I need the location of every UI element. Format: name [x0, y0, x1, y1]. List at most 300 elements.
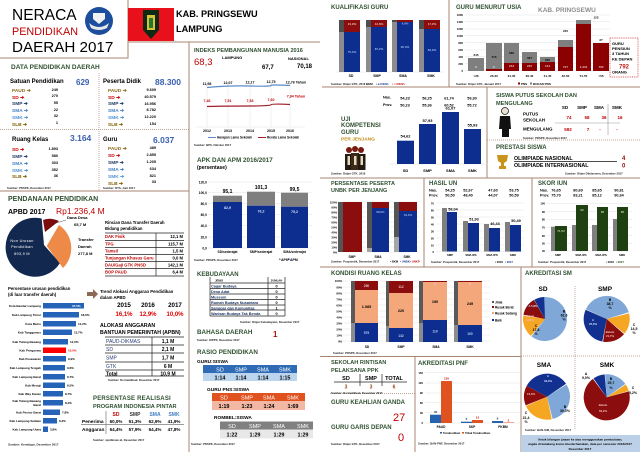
- panel: hasil UN: 50,50: [445, 194, 455, 198]
- line chart: IPM: 12,07: [224, 81, 232, 85]
- stacked bar chart: kondisi ruang kelas: 60%: [336, 304, 343, 308]
- bar chart: hasil UN: 46,43: [490, 222, 500, 226]
- table: rincian dana transfer daerah: 12,1 M: [170, 234, 184, 239]
- panel: prestasi siswa: 0: [622, 164, 626, 170]
- stacked bar chart: kualifikasi: 17,2%: [428, 22, 437, 26]
- bar chart: uji kompetensi: [390, 106, 488, 173]
- panel: guru: SMP ➔: [108, 160, 125, 166]
- panel: kebudayaan: Sanggar dan Komunitas: [211, 306, 255, 310]
- line chart: IPM: 7,60: [268, 98, 274, 102]
- panel: guru menurut usia: Sumber: Ditjen GTK, Januari 2017: [456, 82, 502, 86]
- bar chart: persentase urusan pendidikan: 3,8%: [50, 428, 57, 432]
- panel: trend alokasi anggaran pendidikan: 10,0%: [166, 312, 184, 318]
- panel: indeks pembangunan manusia: 68,3: [194, 57, 212, 68]
- bar chart: akreditasi PNF: SKP: [469, 425, 476, 429]
- pie chart: APBD: [6, 215, 94, 277]
- table: rombel siswa: 1:22: [226, 432, 238, 438]
- panel: akreditasi PNF: AKREDITASI PNF: [418, 361, 468, 367]
- panel: trend alokasi anggaran pendidikan: [100, 289, 184, 318]
- panel: kebudayaan: JUMLAH: [271, 278, 282, 282]
- pie chart: SMA: [523, 362, 571, 424]
- stacked bar chart: APK APM: 82,9: [224, 206, 231, 210]
- bar chart: hasil UN: 60: [431, 208, 434, 212]
- panel: skor IUN: 85,12: [592, 194, 602, 198]
- stacked bar chart: usia guru: 240: [527, 64, 532, 68]
- table: alokasi anggaran bantuan pemerintah: Total: [106, 372, 118, 378]
- table: rincian dana transfer daerah: DAK Fisik: [105, 234, 125, 239]
- table: persentase realisasi PIP: SD: [113, 412, 120, 418]
- panel: indeks pembangunan manusia: [194, 48, 313, 147]
- stacked bar chart: kualifikasi: 4,9%: [402, 22, 409, 26]
- panel: peserta didik: 16.956: [144, 102, 156, 106]
- title block: PENDIDIKAN: [12, 26, 78, 38]
- pie chart: APBD: Transfer: [78, 237, 94, 242]
- regency logo and name: KAB. PRINGSEWU: [176, 9, 258, 19]
- panel: uji kompetensi guru: 50,23: [400, 104, 410, 108]
- table: guru PNS siswa: 1:23: [241, 404, 253, 410]
- bar chart: skor IUN: 60: [542, 234, 545, 238]
- stacked bar chart: UNBK: 40%: [331, 230, 338, 234]
- panel: rasio pendidikan: [191, 349, 313, 446]
- bar chart: skor IUN: SMK: [619, 253, 625, 257]
- callout: guru pensiun: GURU: [612, 41, 624, 46]
- pie chart: SMP: B: [609, 298, 612, 302]
- table: guru siswa: SD: [216, 368, 224, 374]
- arrow: trend alokasi: [87, 289, 98, 299]
- bar chart: persentase urusan pendidikan: Kab Tulang Bawang: [13, 399, 41, 403]
- legend: [492, 300, 517, 322]
- stacked bar chart: usia guru: 1600: [457, 13, 463, 17]
- panel: peserta didik: SLB ➔: [108, 122, 124, 128]
- panel: siswa putus sekolah dan mengulang: MENGULANG: [523, 126, 553, 132]
- pie chart: SMP: %: [608, 306, 612, 310]
- bar chart: persentase urusan pendidikan: 7,8%: [62, 410, 69, 414]
- stacked bar chart: kualifikasi: [335, 20, 445, 86]
- bar chart: persentase urusan pendidikan: [8, 286, 90, 446]
- panel: indeks pembangunan manusia: INDEKS PEMBANGUNAN MANUSIA 2016: [194, 48, 303, 54]
- table: alokasi anggaran bantuan pemerintah: ALOKASI ANGGARAN: [100, 323, 155, 329]
- table: rombel siswa: SMA: [273, 424, 285, 430]
- panel: prestasi siswa: PRESTASI SISWA: [496, 145, 547, 151]
- bar chart: hasil UN: [431, 202, 524, 264]
- panel: uji kompetensi guru: 54,23: [400, 96, 410, 100]
- line chart: IPM: 2012: [203, 129, 211, 133]
- bar chart: persentase urusan pendidikan: Kota Metro: [25, 322, 41, 326]
- pie chart: SMA: 33,3%: [544, 379, 552, 383]
- pie chart: SMA: %: [524, 420, 528, 424]
- line chart: IPM: 12,76 Tahun: [286, 80, 306, 84]
- panel: guru: 1.205: [146, 160, 156, 164]
- pie chart: SMA: B: [564, 405, 567, 409]
- stacked bar chart: APK APM: 101,3: [255, 185, 267, 191]
- panel: trend alokasi anggaran pendidikan: 16,1%: [115, 312, 133, 318]
- panel: guru: 33: [152, 180, 156, 184]
- pie chart: SMP: 38,7: [607, 302, 613, 306]
- panel: kondisi ruang kelas: [331, 271, 517, 355]
- bar chart: persentase urusan pendidikan: Kab Way Kanan: [18, 392, 41, 396]
- panel: kebudayaan: 1: [275, 306, 278, 310]
- panel: kebudayaan: Museum: [211, 296, 227, 300]
- stacked bar chart: usia guru: 1.344: [580, 65, 588, 69]
- panel: kebudayaan: Warisan Budaya Tak Benda: [211, 312, 261, 316]
- bar chart: hasil UN: 58,04: [448, 208, 459, 212]
- callout: guru pensiun: 792: [619, 64, 630, 70]
- panel: persentase peserta UNBK: PERSENTASE PESERTA: [331, 181, 395, 187]
- bar chart: persentase urusan pendidikan: Kota Bandar Lampung: [9, 304, 41, 308]
- panel: kebudayaan: KEBUDAYAAN: [197, 272, 239, 278]
- panel: kebudayaan: 0: [275, 312, 278, 316]
- table: guru PNS siswa: SMA: [263, 396, 275, 402]
- table: persentase realisasi PIP: SMP: [130, 412, 141, 418]
- panel: guru: SD ➔: [108, 153, 121, 159]
- panel: sekolah rintisan PPK: TOTAL: [385, 376, 404, 382]
- panel: guru: SMK ➔: [108, 174, 125, 180]
- panel: trend alokasi anggaran pendidikan: 2016: [141, 302, 155, 309]
- panel: bahasa daerah: 1: [273, 330, 278, 339]
- bar chart: uji kompetensi: SMA: [446, 168, 455, 173]
- panel: hasil UN: 52,67: [463, 188, 473, 192]
- panel: peserta didik: PAUD ➔: [108, 88, 128, 94]
- title block: NERACA: [12, 7, 77, 24]
- panel: siswa putus sekolah dan mengulang: 58: [584, 115, 590, 120]
- panel: kualifikasi guru: KUALIFIKASI GURU: [331, 5, 388, 11]
- pie chart: SD: %: [534, 332, 538, 336]
- panel: hasil UN: 48,40: [463, 194, 473, 198]
- stacked bar chart: kondisi ruang kelas: 579: [364, 331, 369, 335]
- panel: kebudayaan: Cagar Budaya: [211, 284, 237, 288]
- table: persentase realisasi PIP: 64,4%: [110, 427, 122, 432]
- pie chart: SMP: A: [592, 318, 594, 322]
- panel: trend alokasi anggaran pendidikan: 2015: [117, 302, 131, 309]
- panel: sekolah rintisan PPK: 3: [370, 384, 373, 390]
- stacked bar chart: APK APM: APK: [281, 258, 289, 262]
- panel: skor IUN: 90,34: [614, 194, 625, 198]
- line chart: IPM: [196, 80, 306, 140]
- panel: siswa putus sekolah dan mengulang: 16: [617, 115, 623, 120]
- panel: sekolah rintisan PPK: [331, 360, 407, 395]
- panel: peserta didik: 12.220: [144, 115, 156, 119]
- pie chart: SMK: SMK: [600, 362, 615, 369]
- bar chart: persentase urusan pendidikan: Kab Tulang Bawang: [13, 340, 41, 344]
- table: persentase realisasi PIP: 60,0%: [110, 419, 122, 424]
- stacked bar chart: usia guru: 200: [458, 62, 463, 66]
- stacked bar chart: kualifikasi: 87,2%: [375, 47, 384, 51]
- bar chart: persentase urusan pendidikan: 9,5%: [67, 384, 74, 388]
- bar chart: skor IUN: 90: [580, 208, 584, 212]
- legend: Baik: [495, 318, 502, 322]
- panel: guru menurut usia: GURU MENURUT USIA: [456, 5, 522, 11]
- panel: uji kompetensi guru: 60,52: [444, 104, 454, 108]
- bar chart: hasil UN: 70: [431, 202, 434, 206]
- table: persentase realisasi PIP: 62,9%: [149, 419, 161, 424]
- panel: persentase peserta UNBK: Sumber: Puspendik, Desember 2017: [331, 260, 380, 264]
- table: rincian dana transfer daerah: Tamsil: [105, 248, 118, 254]
- bar chart: hasil UN: SMA IPA: [465, 253, 477, 257]
- panel: sekolah rintisan PPK: SEKOLAH RINTISAN: [331, 360, 386, 366]
- stacked bar chart: usia guru: 200: [545, 58, 550, 62]
- panel: skor IUN: [538, 181, 632, 264]
- stacked bar chart: UNBK: 20%: [331, 240, 338, 244]
- stacked bar chart: APK APM: 100,0: [199, 191, 207, 195]
- icon: ministry logo: [85, 7, 113, 35]
- bar chart: persentase urusan pendidikan: Barat: [33, 403, 41, 407]
- panel: siswa putus sekolah dan mengulang: -: [616, 127, 618, 132]
- panel: hasil UN: Sumber: Puspendik, Desember 2017: [431, 260, 480, 264]
- pie chart: SD: [526, 286, 567, 336]
- stacked bar chart: usia guru: 800: [458, 41, 463, 45]
- stacked bar chart: kondisi ruang kelas: 250: [364, 284, 369, 288]
- bar chart: persentase urusan pendidikan: 6,3%: [59, 419, 66, 423]
- panel: guru: 821: [150, 174, 156, 178]
- panel: sekolah rintisan PPK: PELAKSANA PPK: [331, 368, 379, 374]
- table: alokasi anggaran bantuan pemerintah: BANTUAN PEMERINTAH (APBN): [100, 330, 181, 336]
- bar chart: hasil UN: 50,49: [511, 219, 521, 223]
- stacked bar chart: UNBK: 80%: [331, 210, 338, 214]
- stacked bar chart: UNBK: ▪ UNKP: [410, 260, 420, 264]
- pie chart: SMK: 25,7: [608, 381, 614, 385]
- table: guru siswa: SMA: [257, 368, 269, 374]
- stacked bar chart: usia guru: 600: [458, 48, 463, 52]
- panel: siswa putus sekolah dan mengulang: SMA: [594, 105, 605, 110]
- panel: indeks pembangunan manusia: NASIONAL: [288, 56, 309, 61]
- table: persentase realisasi PIP: SMA: [149, 412, 161, 418]
- stacked bar chart: APK APM: 95,1: [223, 189, 233, 195]
- panel: peserta didik: 8.782: [146, 108, 156, 112]
- bar chart: persentase urusan pendidikan: 13,7%: [74, 330, 83, 334]
- panel: trend alokasi anggaran pendidikan: 12,9%: [139, 312, 157, 318]
- bar chart: uji kompetensi: SMP: [423, 168, 432, 173]
- panel: trend alokasi anggaran pendidikan: dalam APBD: [100, 295, 126, 300]
- stacked bar chart: usia guru: 122: [593, 16, 599, 20]
- pie chart: APBD: Daerah: [78, 244, 92, 249]
- panel: skor IUN: 80,69: [573, 188, 583, 192]
- table: alokasi anggaran bantuan pemerintah: 10,9 M: [160, 372, 176, 378]
- stacked bar chart: usia guru: BUKAN PNS: [533, 82, 551, 86]
- line chart: IPM: 7,84 Tahun: [287, 94, 305, 98]
- bar chart: hasil UN: 10: [431, 244, 434, 248]
- bar chart: akreditasi PNF: PAUD: [437, 425, 446, 429]
- stacked bar chart: UNBK: 10%: [331, 246, 338, 250]
- callout: guru pensiun: [610, 38, 638, 77]
- note box: [521, 435, 640, 452]
- stacked bar chart: usia guru: 1400: [457, 20, 463, 24]
- bar chart: persentase urusan pendidikan: 9,6%: [67, 366, 74, 370]
- panel: peserta didik: 154: [150, 122, 157, 126]
- table: persentase realisasi PIP: PERSENTASE REALISASI: [93, 396, 171, 402]
- stacked bar chart: UNBK: ▪ BKM: [390, 260, 399, 264]
- panel: bahasa daerah: BAHASA DAERAH: [197, 329, 253, 336]
- stacked bar chart: usia guru: 36-40: [526, 74, 534, 78]
- bar chart: skor IUN: ▪ 2016: [606, 260, 614, 264]
- panel: uji kompetensi guru: Prov.: [383, 103, 392, 107]
- pie chart: SMP: C: [633, 323, 636, 327]
- pie chart: SMP: %: [632, 331, 636, 335]
- panel: guru garis depan: [331, 425, 404, 446]
- panel: ruang kelas: 1.893: [48, 147, 58, 151]
- panel: satuan pendidikan: 249: [52, 88, 58, 92]
- stacked bar chart: kondisi ruang kelas: 20%: [336, 328, 343, 332]
- note box: angka di belakang koma disederhanakan, data per semester 2016/2017: [528, 442, 632, 446]
- stacked bar chart: kondisi ruang kelas: 220: [398, 309, 404, 313]
- bar chart: persentase urusan pendidikan: 9,7%: [67, 375, 74, 379]
- panel: siswa putus sekolah dan mengulang: 592: [564, 127, 572, 132]
- panel: sekolah rintisan PPK: Sumber: Dormatikbud, Desember 2017: [331, 391, 383, 395]
- bar chart: hasil UN: SMK: [510, 253, 516, 257]
- line chart: IPM: 7,51: [224, 99, 232, 103]
- panel: kebudayaan: [197, 272, 300, 324]
- line chart: IPM: 2014: [246, 129, 254, 133]
- panel: satuan pendidikan: 629: [76, 78, 90, 87]
- stacked bar chart: kondisi ruang kelas: 50%: [336, 310, 343, 314]
- panel: satuan pendidikan: Satuan Pendidikan: [10, 79, 64, 85]
- table: guru PNS siswa: SMP: [241, 396, 253, 402]
- bar chart: uji kompetensi: 54,62: [400, 134, 411, 138]
- panel: satuan pendidikan: SMP ➔: [12, 101, 29, 107]
- note box: Desember 2017: [569, 447, 592, 451]
- panel: guru garis depan: Sumber: Ditjen GTK, Desember 2017: [331, 442, 380, 446]
- bar chart: persentase urusan pendidikan: Kab Lampung Timur: [12, 313, 42, 317]
- stacked bar chart: kualifikasi: ▪ ≥ D4/S1: [376, 82, 389, 86]
- panel: ruang kelas: SLB ➔: [12, 174, 28, 180]
- panel: hasil UN: 44,07: [488, 194, 498, 198]
- bar chart: uji kompetensi: SMK: [468, 168, 477, 173]
- table: persentase realisasi PIP: Penerima: [82, 419, 104, 425]
- bar chart: persentase urusan pendidikan: 37,5%: [72, 304, 81, 308]
- table: guru PNS siswa: [207, 387, 305, 410]
- panel: rasio pendidikan: Sumber: PDSPK, Desember 2017: [191, 442, 235, 446]
- panel: skor IUN: 90,81: [614, 188, 624, 192]
- table: alokasi anggaran bantuan pemerintah: 6 M: [164, 364, 172, 370]
- stacked bar chart: usia guru: 717: [563, 65, 568, 69]
- panel: siswa putus sekolah dan mengulang: SD: [562, 105, 569, 110]
- stacked bar chart: kualifikasi: 12,8%: [375, 22, 384, 26]
- stacked bar chart: kondisi ruang kelas: 110: [432, 330, 438, 334]
- pie chart: SD: 62,6: [561, 314, 567, 318]
- bar chart: skor IUN: 71,52: [557, 229, 565, 233]
- panel: ruang kelas: SD ➔: [12, 147, 25, 153]
- panel: kebudayaan: 0: [275, 284, 278, 288]
- panel: indeks pembangunan manusia: Sumber: BPS, Oktober 2017: [194, 143, 232, 147]
- panel: siswa putus sekolah dan mengulang: SEKOLAH: [523, 118, 545, 122]
- panel: satuan pendidikan: 22: [54, 108, 58, 112]
- bar chart: uji kompetensi: SD: [403, 168, 408, 173]
- table: alokasi anggaran bantuan pemerintah: 1,1 M: [162, 339, 174, 345]
- bar chart: persentase urusan pendidikan: Kab Pesisir Barat: [16, 410, 41, 414]
- pie chart: SD: A 5,8%: [528, 304, 538, 308]
- stacked bar chart: UNBK: [330, 200, 420, 264]
- table: rombel siswa: [214, 415, 313, 438]
- table: alokasi anggaran bantuan pemerintah: 1,7 M: [162, 356, 174, 362]
- panel: guru menurut usia: [456, 5, 638, 86]
- bar chart: persentase urusan pendidikan: 8,4%: [65, 401, 72, 405]
- panel: peserta didik: 88.300: [155, 77, 181, 87]
- panel: peserta didik: SMK ➔: [108, 115, 125, 121]
- panel: hasil UN: Prov.: [429, 194, 438, 198]
- pie chart: SMA: 21,4: [523, 416, 529, 420]
- panel: uji kompetensi guru: 55,36: [422, 104, 432, 108]
- table: rombel siswa: 1:29: [273, 432, 285, 438]
- panel: satuan pendidikan: SMA ➔: [12, 108, 29, 114]
- bar chart: akreditasi PNF: 30: [420, 411, 423, 415]
- panel: prestasi siswa: OLIMPIADE NASIONAL: [514, 156, 573, 162]
- panel: siswa putus sekolah dan mengulang: SMK: [612, 105, 623, 110]
- stacked bar chart: APK APM: 75,2: [291, 210, 298, 214]
- stacked bar chart: kualifikasi: SMK: [427, 74, 435, 78]
- panel: skor IUN: 76,65: [551, 188, 561, 192]
- table: guru PNS siswa: 1:69: [287, 404, 299, 410]
- panel: indeks pembangunan manusia: LAMPUNG: [222, 55, 242, 60]
- panel: rasio pendidikan: RASIO PENDIDIKAN: [197, 349, 258, 356]
- panel: ruang kelas: SMP ➔: [12, 154, 29, 160]
- table: rombel siswa: ROMBEL:SISWA: [214, 415, 252, 421]
- stacked bar chart: usia guru: >55: [598, 74, 604, 78]
- callout: guru pensiun: 3 TAHUN: [612, 51, 629, 56]
- panel: peserta didik: SD ➔: [108, 95, 121, 101]
- panel: skor IUN: 75,70: [551, 194, 561, 198]
- pie chart: SD: B: [563, 310, 566, 314]
- panel: satuan pendidikan: SD ➔: [12, 95, 25, 101]
- stacked bar chart: APK APM: [199, 180, 312, 262]
- panel: pendanaan pendidikan: PENDANAAN PENDIDIKAN: [8, 196, 98, 203]
- stacked bar chart: usia guru: 31: [493, 66, 496, 69]
- stacked bar chart: usia guru: 243: [509, 64, 514, 68]
- panel: guru: [103, 135, 175, 190]
- panel: uji kompetensi guru: 59,30: [467, 96, 477, 100]
- stacked bar chart: kondisi ruang kelas: 0%: [338, 340, 343, 344]
- line chart: IPM: 11,98: [203, 82, 211, 86]
- stacked bar chart: usia guru: <26: [473, 74, 479, 78]
- table: persentase realisasi PIP: [81, 396, 184, 442]
- panel: peserta didik: SMA ➔: [108, 108, 125, 114]
- bar chart: skor IUN: 80: [542, 218, 545, 222]
- stacked bar chart: usia guru: 46-50: [562, 74, 570, 78]
- stacked bar chart: kualifikasi: ▪ < D4/S1: [392, 82, 405, 86]
- stacked bar chart: kondisi ruang kelas: SMP: [397, 345, 405, 349]
- table: rincian dana transfer daerah: 1,5 M: [173, 248, 184, 254]
- stacked bar chart: UNBK: 90%: [331, 206, 338, 210]
- stacked bar chart: APK APM: SMP/sederajat: [250, 250, 273, 254]
- stacked bar chart: usia guru: PNS: [521, 82, 527, 86]
- bar chart: akreditasi PNF: PKBM: [498, 425, 508, 429]
- panel: kebudayaan: JENIS: [215, 278, 223, 282]
- panel: uji kompetensi guru: Nas.: [383, 96, 391, 100]
- bar chart: akreditasi PNF: 13: [476, 416, 479, 420]
- panel: peserta didik: 9.609: [146, 88, 156, 92]
- bar chart: skor IUN: 50: [542, 242, 545, 246]
- pie chart: SMK: A: [585, 372, 588, 376]
- stacked bar chart: kualifikasi: 82,9%: [428, 48, 437, 52]
- panel: kualifikasi guru: Sumber: Ditjen GTK, 2017: [331, 82, 366, 86]
- bar chart: uji kompetensi: 55,93: [467, 122, 478, 128]
- stacked bar chart: usia guru: 27: [599, 38, 603, 42]
- bar chart: hasil UN: 50: [431, 216, 434, 220]
- panel: uji kompetensi guru: 61,74: [444, 96, 455, 100]
- panel: ruang kelas: 352: [52, 168, 58, 172]
- pie chart: APBD: 65,7 M: [74, 222, 87, 227]
- panel: ruang kelas: SMA ➔: [12, 161, 29, 167]
- bar chart: persentase urusan pendidikan: 12,0%: [70, 340, 79, 344]
- panel: kebudayaan: 0: [275, 296, 278, 300]
- stacked bar chart: usia guru: 26-30: [490, 74, 498, 78]
- pie chart: SMP: SMP: [598, 286, 613, 293]
- stacked bar chart: UNBK: 88,0%: [377, 210, 385, 214]
- pie chart: SMP: 21,7%: [606, 334, 614, 338]
- panel: sekolah rintisan PPK: SD: [342, 376, 350, 382]
- table: rincian dana transfer daerah: TPG: [105, 242, 114, 246]
- stacked bar chart: kualifikasi: 24,9%: [348, 22, 357, 26]
- panel: pendanaan pendidikan: APBD 2017: [8, 209, 45, 216]
- panel: uji kompetensi guru: Sumber: Ditjen GTK, 2016: [331, 172, 366, 176]
